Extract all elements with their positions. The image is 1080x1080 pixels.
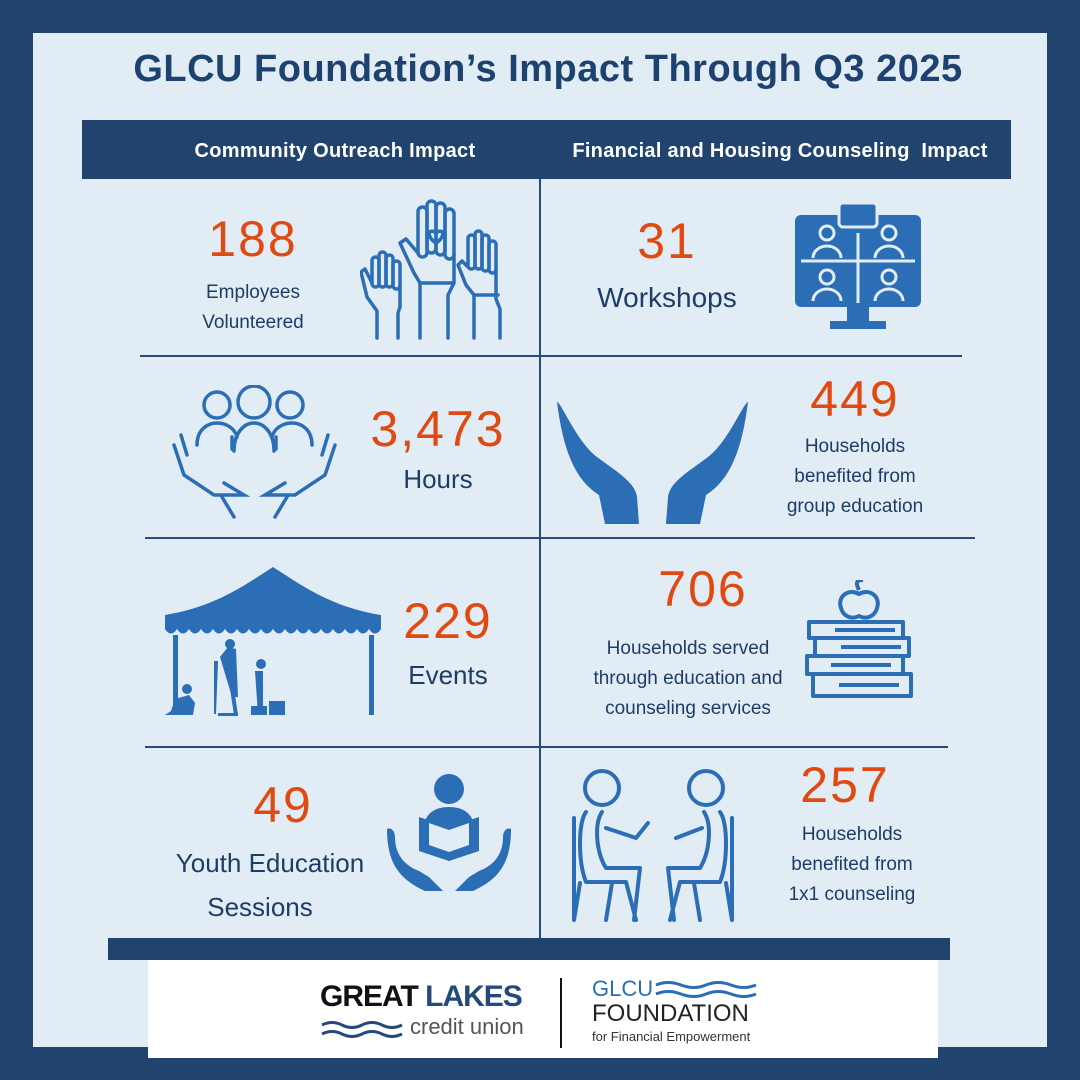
icon: monitor video call	[795, 204, 921, 329]
text: Youth Education	[176, 848, 364, 878]
stat: 3473 hours: 3,473	[370, 401, 506, 457]
header bar	[82, 120, 1011, 179]
logo: glcu foundation: GLCU	[592, 976, 653, 1001]
icon: two hands	[557, 402, 748, 524]
text: 1x1 counseling	[789, 884, 915, 905]
stat: 449 households: group education	[787, 496, 923, 517]
stat: 188 employees: 188	[208, 211, 298, 267]
icon: raised hands	[360, 199, 502, 340]
logo: great lakes credit union: GREAT LAKES	[320, 980, 522, 1013]
text: counseling services	[605, 698, 771, 719]
logo: glcu foundation: for Financial Empowerment	[592, 1029, 750, 1044]
stat: 229 events: Events	[408, 660, 488, 690]
logo: glcu foundation	[592, 976, 756, 1044]
text: Households	[802, 824, 902, 845]
icon: books and apple	[805, 580, 913, 698]
icon: counseling two seated people	[572, 769, 734, 922]
stat: 31 workshops: 31	[637, 213, 697, 269]
icon: reading child in hands	[387, 774, 511, 891]
logo: great lakes credit union: credit union	[410, 1014, 524, 1039]
icon: tent volunteers	[165, 567, 381, 716]
stat: 188 employees: Employees	[206, 282, 300, 303]
stat: 3473 hours	[370, 401, 506, 494]
heading: financial counseling: Financial and Housing Counseling Impact	[572, 140, 988, 162]
text: benefited from	[791, 854, 913, 875]
stat: 449 households: benefited from	[794, 466, 916, 487]
logo: glcu foundation: FOUNDATION	[592, 1000, 749, 1027]
text: Households served	[607, 638, 769, 659]
stat: 3473 hours: Hours	[403, 464, 473, 494]
stat: 257 households: 257	[800, 757, 890, 813]
heading: community outreach: Community Outreach Impact	[195, 140, 475, 162]
text: Sessions	[207, 892, 313, 922]
stat: 449 households: 449	[810, 371, 900, 427]
stat: 449 households: Households	[805, 436, 905, 457]
text: through education and	[593, 668, 783, 689]
stat: 229 events: 229	[403, 593, 493, 649]
stat: 31 workshops	[597, 213, 737, 313]
logo: great lakes credit union	[320, 980, 524, 1039]
stat: 31 workshops: Workshops	[597, 282, 737, 313]
stat: 188 employees: Volunteered	[202, 312, 304, 333]
footer: logos	[148, 960, 938, 1058]
icon: people in hands	[172, 385, 337, 519]
stat: 188 employees	[202, 211, 304, 333]
footer bar	[108, 938, 950, 960]
stat: 706 households: 706	[658, 561, 748, 617]
title: GLCU Foundation’s Impact Through Q3 2025	[133, 48, 963, 90]
stat: 449 households	[787, 371, 923, 517]
stat: 229 events	[403, 593, 493, 690]
stat: 49 youth education: 49	[253, 777, 313, 833]
